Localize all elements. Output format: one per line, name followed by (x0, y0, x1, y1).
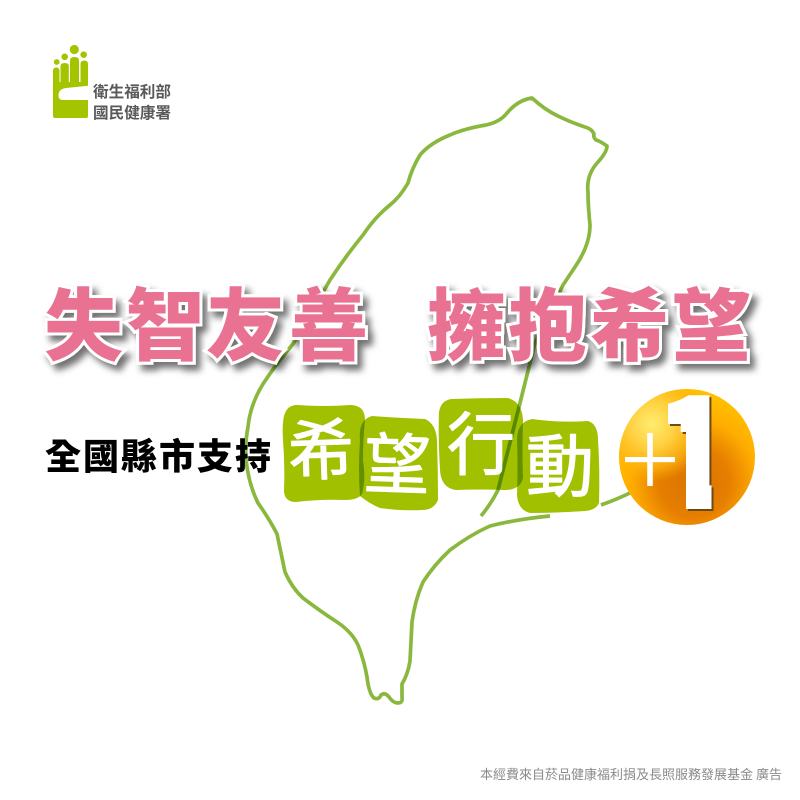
numeral one shadow: 1 (648, 337, 740, 554)
plus one badge (619, 389, 755, 525)
hope action tiles (283, 390, 599, 513)
tile: 動: 動 (526, 412, 594, 511)
tile: 望: 望 (363, 411, 432, 509)
map outline of Taiwan (246, 98, 634, 703)
icon: hand with dots (53, 45, 88, 118)
title: 擁抱希望 (427, 262, 751, 377)
logo text: 衛生福利部 (93, 80, 171, 102)
subtitle: 全國縣市支持 (45, 428, 273, 480)
title (44, 262, 751, 377)
logo: National Health Administration (53, 45, 171, 123)
logo text: 國民健康署 (93, 101, 171, 123)
tile: 希: 希 (286, 397, 355, 495)
tile: 行: 行 (447, 390, 515, 489)
title: 失智友善 (44, 262, 368, 377)
funding note: 本經費來自菸品健康福利捐及長照服務發展基金 廣告 (480, 764, 782, 783)
orange circle (619, 389, 755, 525)
plus sign: + (621, 375, 679, 531)
numeral one: 1 (646, 335, 738, 552)
logo text (93, 80, 171, 123)
